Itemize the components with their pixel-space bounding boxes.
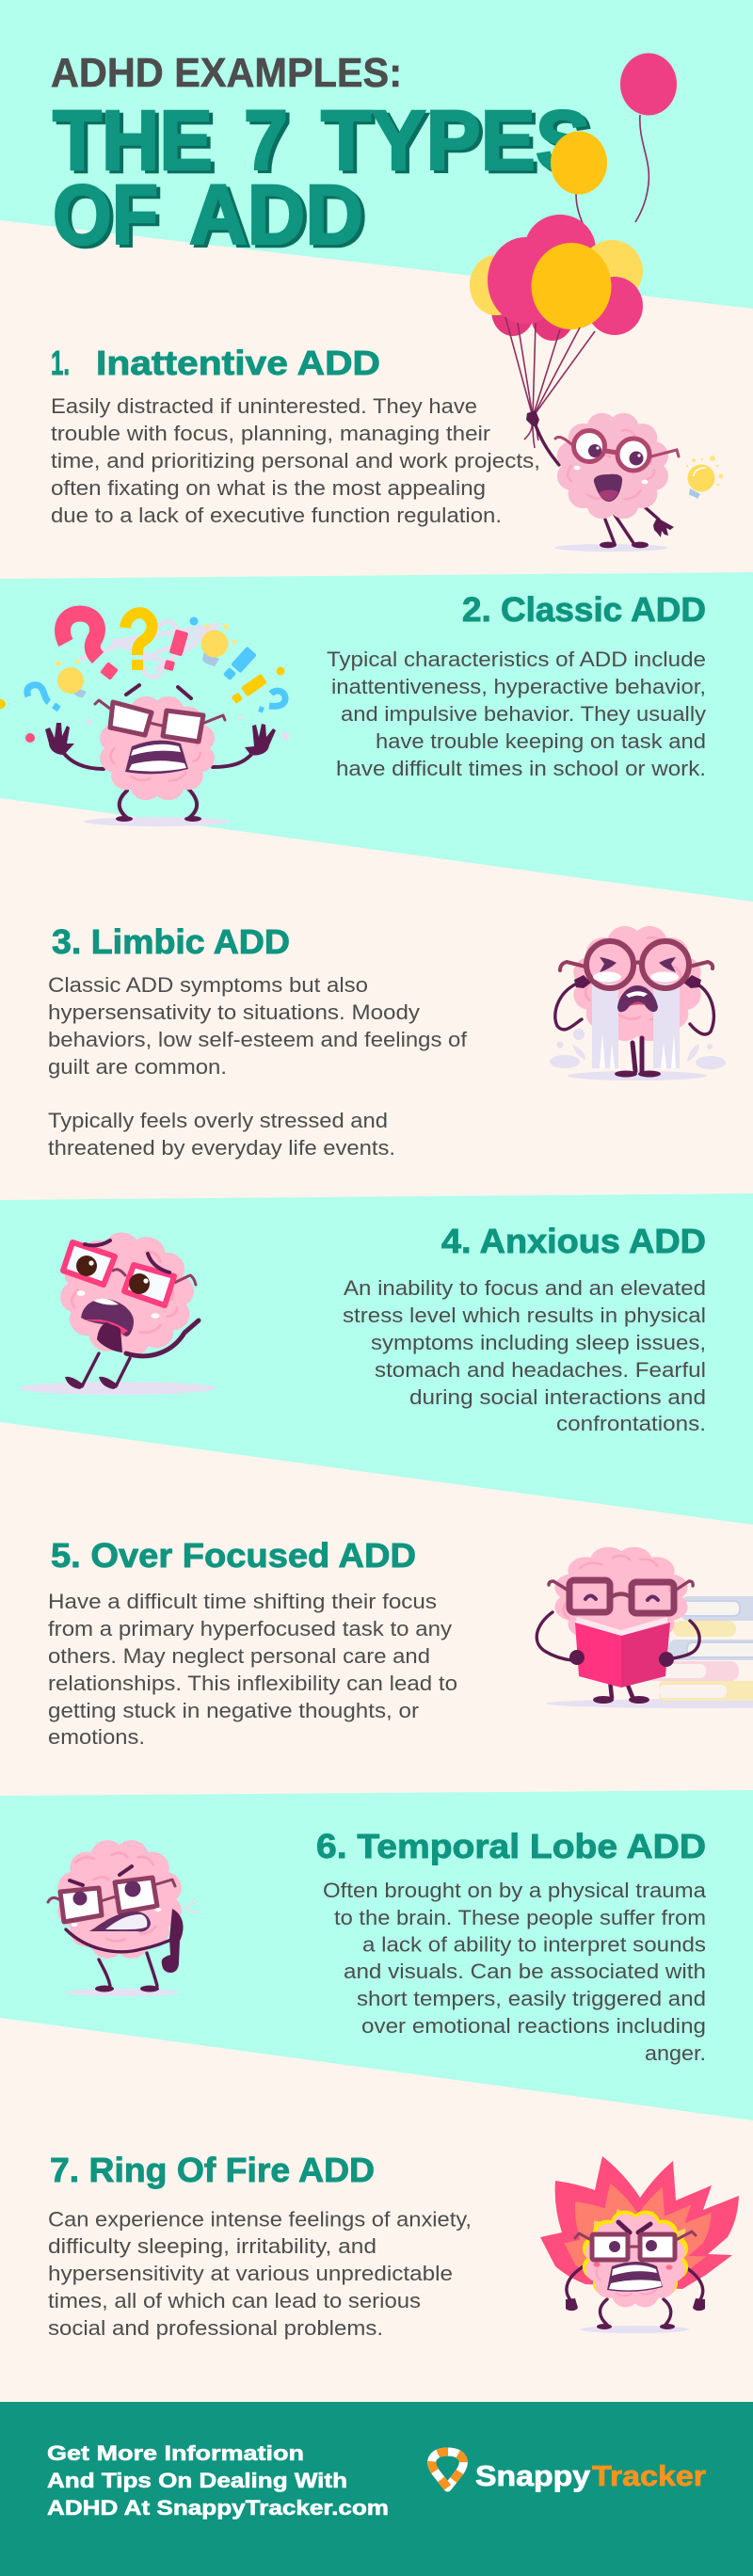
heading 1: Inattentive ADD — [96, 344, 380, 382]
loose balloon strings — [576, 115, 649, 226]
hands and feet — [45, 723, 276, 822]
brain — [557, 413, 668, 519]
pupils — [588, 444, 644, 465]
glasses — [48, 1878, 175, 1922]
footer band — [0, 2402, 753, 2576]
mouth — [607, 2262, 663, 2292]
mouth — [617, 985, 658, 1012]
cheek highlights — [574, 466, 648, 484]
closed eyes — [600, 957, 676, 972]
flames — [540, 2156, 739, 2289]
text block 5: emotions. — [48, 1725, 145, 1749]
shadow — [66, 1989, 179, 1996]
mouth — [81, 1299, 134, 1336]
brain — [52, 1224, 202, 1365]
text block 2: have difficult times in school or work. — [336, 757, 706, 780]
cheeks — [77, 1290, 160, 1319]
panel: 2 classic ADD — [0, 590, 707, 826]
shadow — [84, 817, 231, 826]
text block 4: confrontations. — [556, 1412, 706, 1435]
cheeks — [593, 2262, 673, 2270]
hands and feet — [566, 2298, 705, 2329]
pupils — [73, 1880, 141, 1905]
legs and feet — [615, 1038, 661, 1077]
text block 3: threatened by everyday life events. — [48, 1136, 395, 1160]
pupils — [76, 1256, 150, 1294]
blue exclamation — [223, 647, 257, 680]
illustration: confused symbols — [0, 613, 290, 743]
footer call to action — [47, 2441, 389, 2520]
brain — [585, 2215, 685, 2307]
shadow — [546, 1699, 753, 1708]
text block 6: over emotional reactions including — [361, 2014, 706, 2038]
text block 5: getting stuck in negative thoughts, or — [48, 1699, 420, 1722]
panel: 4 anxious ADD — [19, 1222, 706, 1435]
panel: 1 inattentive ADD — [51, 53, 723, 552]
wordmark — [475, 2459, 706, 2492]
scribble — [80, 621, 218, 677]
text block 2: have trouble keeping on task and — [376, 729, 706, 753]
heading 3: 3. Limbic ADD — [52, 922, 290, 961]
text block 4: during social interactions and — [409, 1385, 706, 1409]
brain — [573, 926, 701, 1041]
text block 5: from a primary hyperfocused task to any — [48, 1617, 453, 1640]
tears — [593, 971, 679, 983]
hands — [574, 975, 701, 988]
illustration: shocked brain — [45, 685, 276, 826]
panel: 7 ring of fire ADD — [48, 2151, 739, 2340]
panel: 5 over focused ADD — [48, 1536, 753, 1749]
yellow question mark — [125, 613, 152, 670]
legs and feet — [593, 1680, 649, 1704]
wordmark: Tracker — [592, 2459, 706, 2492]
text block 6: to the brain. These people suffer from — [334, 1906, 706, 1929]
text block 5: others. May neglect personal care and — [48, 1644, 430, 1668]
text block 7: hypersensitivity at various unpredictable — [48, 2262, 453, 2285]
illustration: angry brain — [48, 1840, 200, 1996]
arms — [537, 1612, 699, 1660]
panel: 6 temporal lobe ADD — [48, 1827, 707, 2065]
legs and feet — [95, 1953, 159, 1992]
glasses — [549, 1580, 693, 1613]
text block 2 — [327, 648, 707, 780]
gritted mouth — [89, 1912, 151, 1932]
text block 6 — [323, 1879, 707, 2065]
loose yellow balloon — [551, 132, 607, 194]
title line: ADHD examples: ADHD EXAMPLES: — [51, 50, 402, 96]
logo — [432, 2452, 706, 2492]
footer — [0, 2402, 753, 2576]
text block 5: Have a difficult time shifting their focus — [48, 1590, 437, 1613]
text block 4: stress level which results in physical — [343, 1304, 706, 1327]
title line: the 7 types: THE — [56, 97, 216, 191]
text block 5 — [48, 1590, 457, 1749]
limbs — [536, 425, 659, 544]
bulbs — [57, 631, 228, 697]
text block 1: time, and prioritizing personal and work projects, — [51, 449, 540, 472]
title line: of ADD: OF — [56, 171, 162, 265]
title line: the 7 types — [53, 94, 594, 191]
heading 5: 5. Over Focused ADD — [51, 1536, 416, 1575]
knot — [526, 410, 539, 427]
title — [51, 50, 594, 265]
illustration: anxious brain — [19, 1224, 216, 1395]
title line: of ADD: ADD — [193, 171, 367, 265]
pupils — [609, 2240, 657, 2252]
footer call to action: Get More Information — [47, 2441, 304, 2465]
shadow — [19, 1382, 216, 1395]
title line: the 7 types: 7 — [248, 97, 292, 191]
hand — [97, 1322, 122, 1352]
mouth — [125, 741, 188, 774]
balloon bunch — [470, 215, 643, 341]
wordmark: Snappy — [475, 2459, 591, 2492]
eyebrows — [70, 1866, 132, 1885]
legs and feet — [65, 1353, 130, 1389]
shadow — [580, 2326, 689, 2333]
heading 7: 7. Ring Of Fire ADD — [50, 2151, 375, 2189]
text block 7: difficulty sleeping, irritability, and — [48, 2234, 376, 2258]
title line: the 7 types: TYPES — [325, 97, 594, 191]
eyebrows — [126, 685, 191, 698]
heading 1: 1. — [51, 344, 70, 382]
title line: the 7 types: TYPES — [321, 94, 590, 188]
eyebrows — [618, 2222, 650, 2232]
text block 6: anger. — [645, 2041, 706, 2065]
text block 3: hypersensativity to situations. Moody — [48, 1000, 421, 1024]
shadow — [568, 1071, 707, 1080]
brain — [57, 1840, 182, 1959]
text block 7 — [48, 2208, 472, 2340]
glasses — [95, 700, 225, 742]
title line: of ADD — [53, 168, 367, 265]
icon: heart pin — [432, 2452, 463, 2488]
text block 1: often fixating on what is the most appealing — [51, 476, 486, 500]
arm — [66, 1929, 177, 1952]
text block 4: An inability to focus and an elevated — [344, 1276, 706, 1300]
heading 4: 4. Anxious ADD — [441, 1222, 706, 1260]
text block 7: times, all of which can lead to serious — [48, 2289, 421, 2312]
splash — [550, 1029, 726, 1069]
smiling eyes — [585, 1596, 658, 1600]
arms and legs — [62, 751, 254, 818]
icon: light bulb — [686, 456, 723, 499]
glasses — [560, 941, 713, 988]
arm — [126, 1320, 199, 1356]
text block 3: Classic ADD symptoms but also — [48, 973, 368, 997]
dots — [0, 617, 290, 743]
text block 2: inattentiveness, hyperactive behavior, — [331, 675, 706, 698]
open book — [575, 1617, 670, 1688]
heading 6: 6. Temporal Lobe ADD — [316, 1827, 706, 1865]
text block 1 — [51, 394, 540, 527]
text block 7: social and professional problems. — [48, 2316, 383, 2340]
yellow brain outline — [583, 2211, 688, 2305]
illustration: reading brain — [537, 1547, 753, 1708]
text block 5: relationships. This inflexibility can lead to — [48, 1672, 457, 1695]
text block 4: symptoms including sleep issues, — [371, 1331, 706, 1354]
motion lines — [184, 1901, 200, 1912]
text block 1: trouble with focus, planning, managing their — [51, 422, 491, 445]
loose pink balloon — [620, 53, 677, 115]
cheek highlights — [72, 1908, 162, 1927]
illustration: balloons — [470, 53, 677, 448]
text block 6: a lack of ability to interpret sounds — [362, 1933, 706, 1956]
title line: of ADD: ADD — [189, 168, 363, 263]
yellow exclamation — [232, 674, 267, 704]
arms — [555, 984, 713, 1034]
text block 3: guilt are common. — [48, 1055, 227, 1079]
illustration: crying brain — [550, 926, 726, 1080]
footer call to action: ADHD At SnappyTracker.com — [47, 2496, 389, 2520]
text block 4 — [343, 1276, 706, 1435]
title line: the 7 types: THE — [53, 94, 213, 188]
heading 2: 2. Classic ADD — [462, 590, 706, 629]
brain — [554, 1547, 688, 1647]
glasses — [555, 431, 679, 471]
text block 2: and impulsive behavior. They usually — [341, 702, 707, 726]
text block 6: Often brought on by a physical trauma — [323, 1879, 707, 1902]
hands — [569, 1650, 674, 1667]
eyebrows — [85, 1240, 169, 1272]
text block 1: due to a lack of executive function regulation. — [51, 504, 502, 527]
mouth — [594, 474, 622, 502]
glasses — [63, 1242, 196, 1305]
shadow — [554, 544, 667, 552]
footer call to action: And Tips On Dealing With — [47, 2469, 347, 2492]
illustration: surprised brain — [536, 413, 679, 552]
arms and legs — [567, 2265, 703, 2325]
pink question mark — [62, 614, 119, 680]
title line: the 7 types: 7 — [244, 94, 288, 188]
glasses — [575, 2232, 696, 2260]
text block 3 — [48, 973, 468, 1160]
text block 1: Easily distracted if uninterested. They have — [51, 394, 477, 418]
text block 6: and visuals. Can be associated with — [344, 1960, 706, 1983]
book stack — [640, 1596, 753, 1701]
title line: of ADD: OF — [53, 168, 158, 263]
brain — [100, 696, 215, 800]
bunch strings — [505, 317, 595, 448]
illustration: brain on fire — [540, 2156, 739, 2333]
blue question marks — [27, 685, 285, 713]
text block 3: behaviors, low self-esteem and feelings of — [48, 1028, 468, 1051]
hand and feet — [600, 518, 674, 548]
pink exclamation — [164, 630, 188, 671]
text block 6: short tempers, easily triggered and — [357, 1987, 706, 2010]
tear streams — [592, 984, 680, 1068]
text block 4: stomach and headaches. Fearful — [375, 1358, 706, 1382]
text block 2: Typical characteristics of ADD include — [327, 648, 706, 671]
hand — [162, 1909, 184, 1973]
panel: 3 limbic ADD — [48, 922, 726, 1160]
text block 3: Typically feels overly stressed and — [48, 1109, 388, 1132]
text block 7: Can experience intense feelings of anxiety, — [48, 2208, 472, 2231]
